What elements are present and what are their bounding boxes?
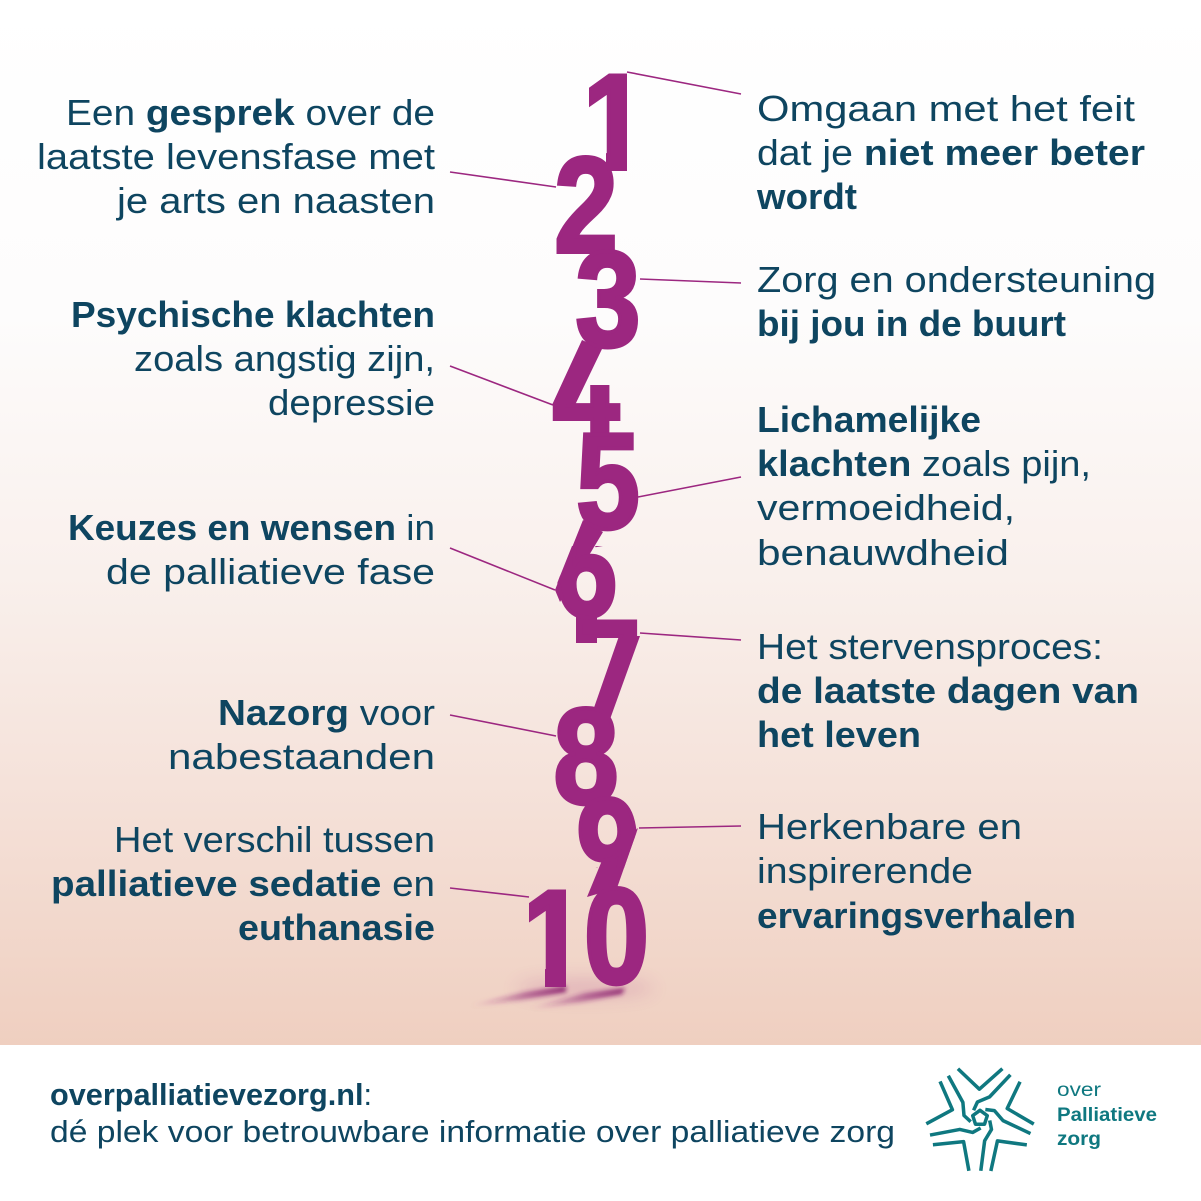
text block: stervensproces (757, 626, 1139, 755)
text block: stervensproces: het leven (757, 714, 921, 755)
footer text: overpalliatievezorg.nl: (50, 1077, 372, 1112)
number 10 (529, 886, 646, 987)
panel: white footer (0, 1045, 1201, 1201)
text block: een gesprek: Een gesprek over de (66, 92, 435, 133)
text block: zorg in de buurt: bij jou in de buurt (757, 303, 1066, 344)
text block: niet meer beter: wordt (756, 176, 857, 217)
number 7: 7 (575, 592, 641, 744)
number 10: 0 (584, 860, 649, 1012)
number 2: 2 (554, 129, 618, 281)
text block: niet meer beter (756, 88, 1145, 217)
number 3: 3 (575, 223, 641, 375)
number 8: 8 (553, 680, 619, 832)
icon: star logo (926, 1069, 1036, 1176)
text block: nazorg (168, 692, 435, 777)
logo wordmark: over (1057, 1080, 1102, 1101)
text block: lichamelijke klachten: vermoeidheid, (757, 487, 1015, 528)
text block: ervaringsverhalen: inspirerende (757, 850, 973, 891)
text block: ervaringsverhalen: ervaringsverhalen (757, 895, 1076, 936)
text block: nazorg: Nazorg voor (218, 692, 435, 733)
text block: keuzes en wensen: de palliatieve fase (106, 551, 435, 592)
text block: psychische klachten: zoals angstig zijn, (134, 338, 435, 379)
text block: stervensproces: Het stervensproces: (757, 626, 1103, 667)
text block: ervaringsverhalen (757, 806, 1076, 936)
text block: palliatieve sedatie en euthanasie: palliatieve sedatie en (51, 863, 435, 904)
number 10: 1 (519, 863, 587, 1014)
logo wordmark: zorg (1057, 1129, 1101, 1150)
text block: palliatieve sedatie en euthanasie: euthanasie (238, 907, 435, 948)
text block: psychische klachten: Psychische klachten (71, 294, 435, 335)
text block: keuzes en wensen (68, 507, 435, 592)
shadow under number 10 (468, 979, 655, 1009)
text block: zorg in de buurt (757, 259, 1156, 344)
leader lines (450, 72, 741, 897)
logo wordmark (1057, 1080, 1157, 1150)
text block: palliatieve sedatie en euthanasie (51, 819, 435, 948)
text block: niet meer beter: Omgaan met het feit (757, 88, 1135, 129)
text block: lichamelijke klachten: klachten zoals pijn, (757, 443, 1091, 484)
footer text: dé plek voor betrouwbare informatie over palliatieve zorg (50, 1114, 895, 1149)
text block: een gesprek (37, 92, 435, 221)
text block: stervensproces: de laatste dagen van (757, 670, 1139, 711)
text block: niet meer beter: dat je niet meer beter (757, 132, 1145, 173)
text block: lichamelijke klachten: Lichamelijke (757, 399, 981, 440)
text block: psychische klachten (71, 294, 435, 423)
digit connectors (552, 340, 640, 897)
number 5: 5 (576, 405, 640, 557)
text block: nazorg: nabestaanden (168, 736, 435, 777)
text block: lichamelijke klachten (757, 399, 1091, 573)
text block: palliatieve sedatie en euthanasie: Het verschil tussen (114, 819, 435, 860)
text block: een gesprek: je arts en naasten (116, 180, 435, 221)
text block: een gesprek: laatste levensfase met (37, 136, 435, 177)
footer text (50, 1077, 895, 1149)
text block: ervaringsverhalen: Herkenbare en (757, 806, 1022, 847)
number 6: 6 (554, 493, 618, 645)
number 1: 1 (580, 47, 648, 198)
number stack 1 to 10 (529, 74, 646, 987)
text block: zorg in de buurt: Zorg en ondersteuning (757, 259, 1156, 300)
text block: lichamelijke klachten: benauwdheid (757, 532, 1009, 573)
number 9: 9 (576, 770, 640, 922)
text block: keuzes en wensen: Keuzes en wensen in (68, 507, 435, 548)
text block: psychische klachten: depressie (268, 382, 435, 423)
number 4: 4 (553, 316, 619, 468)
logo wordmark: Palliatieve (1057, 1105, 1157, 1126)
